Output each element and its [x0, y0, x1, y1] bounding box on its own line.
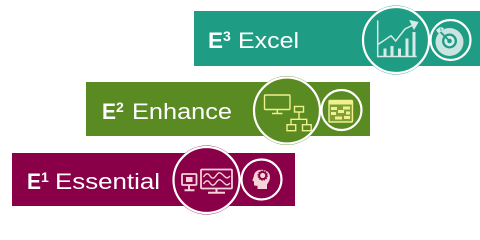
E2 heading: Enhance — [132, 99, 232, 124]
E2 heading: E — [102, 99, 116, 124]
E2 heading: 2 — [116, 99, 124, 115]
E3 heading: E — [208, 28, 223, 53]
E2 large circle — [252, 76, 322, 145]
icon: monitor and network — [254, 78, 320, 144]
E1 large circle — [172, 146, 241, 214]
E3 heading: Excel — [238, 28, 299, 53]
panel: E1 Essential — [12, 146, 295, 214]
E3 large circle — [362, 6, 430, 74]
E1 heading: 1 — [41, 169, 49, 185]
E1 small circle with head and gear icon — [242, 160, 282, 200]
E3 band — [194, 11, 480, 66]
panel: E2 Enhance — [86, 76, 370, 145]
E1 heading: Essential — [55, 169, 160, 194]
E2 band — [86, 82, 370, 136]
icon: growth chart — [363, 7, 429, 73]
icon: monitors with waveforms — [174, 147, 240, 213]
E1 band — [12, 153, 295, 206]
E1 heading: E — [27, 169, 41, 194]
E2 small circle with schedule icon — [322, 90, 362, 130]
E3 small circle with target icon — [430, 20, 470, 60]
panel: E3 Excel — [194, 6, 480, 74]
E3 heading: 3 — [223, 28, 231, 44]
